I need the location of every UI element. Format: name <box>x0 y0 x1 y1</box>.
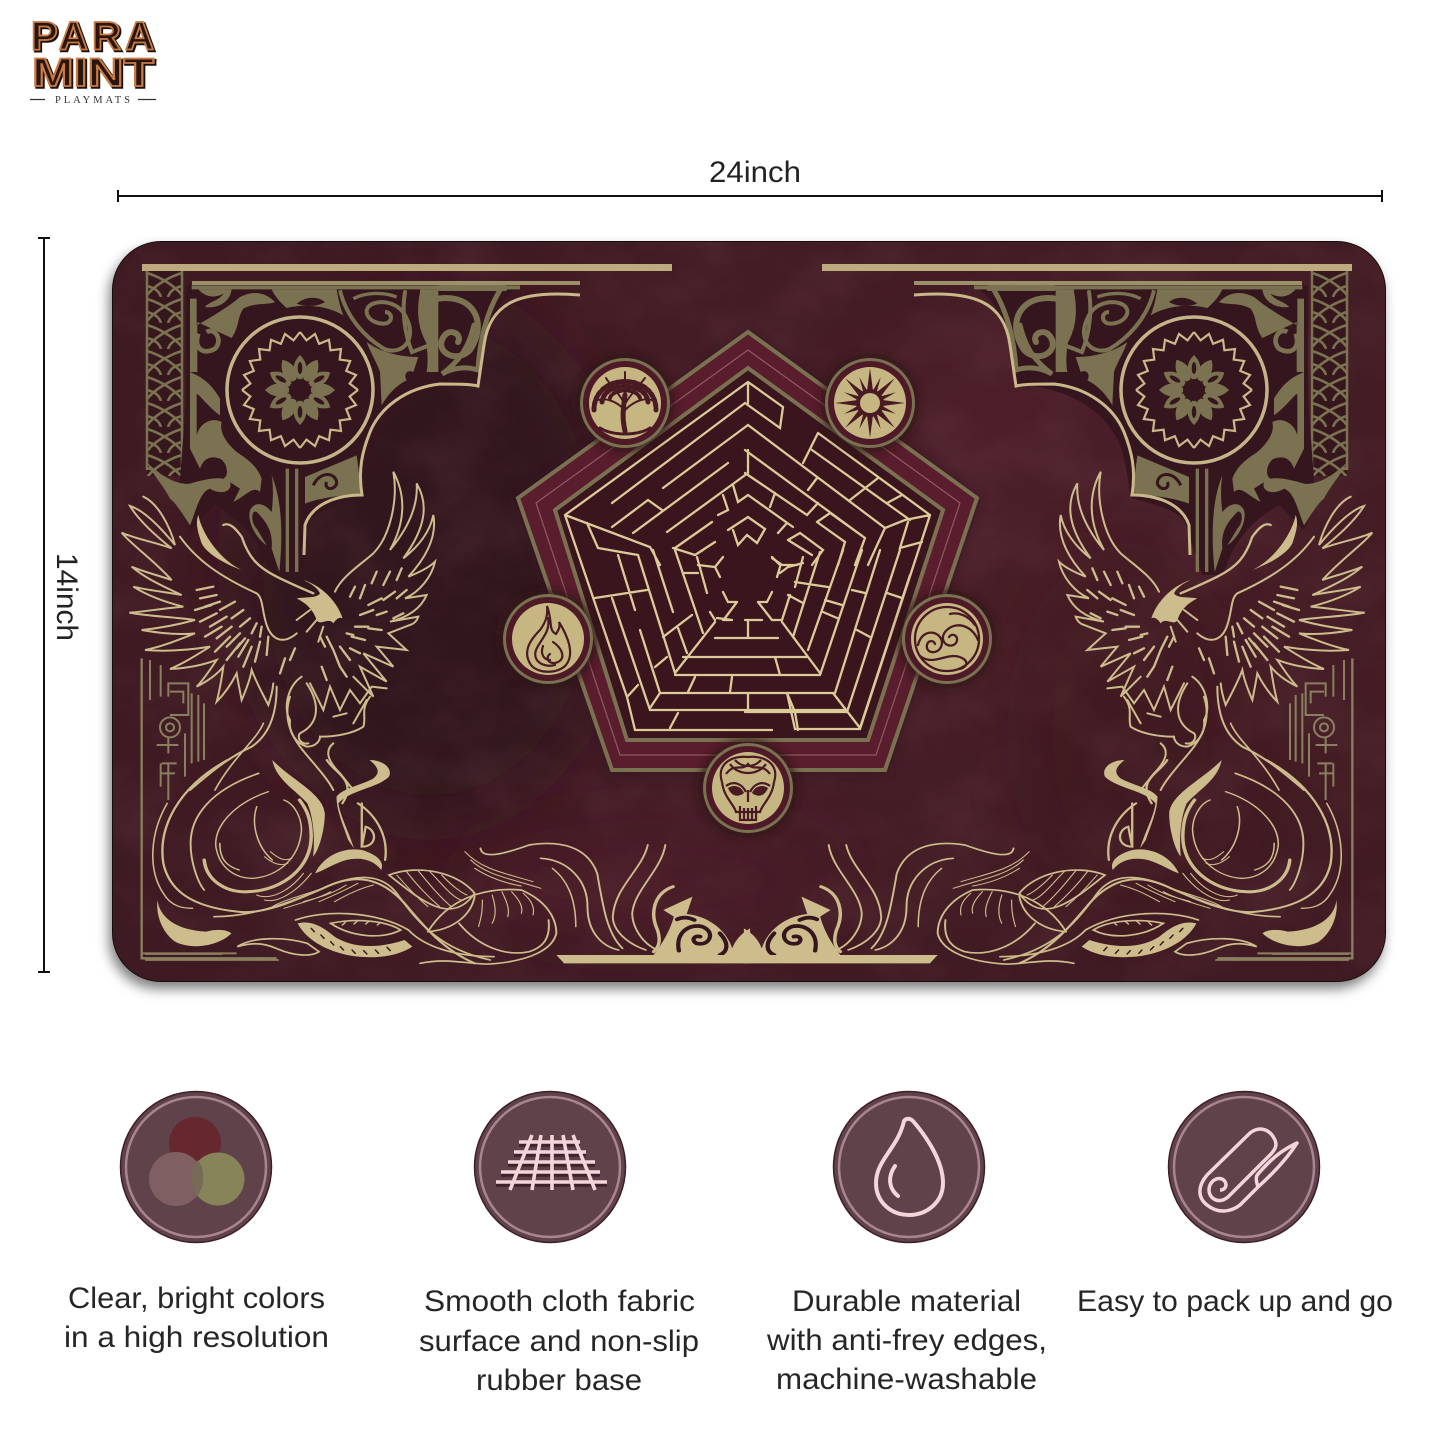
corner and phoenix ornament: right (mirrored) <box>744 264 1372 964</box>
icon: rolled mat <box>1168 1092 1320 1242</box>
upper-right scroll cluster <box>404 288 505 374</box>
feature: durable <box>766 1092 1047 1396</box>
icon: grid <box>474 1092 626 1242</box>
medallion: fire <box>498 589 598 689</box>
phoenix <box>122 472 435 790</box>
pentagon bands <box>512 326 983 776</box>
logo: Para Mint Playmats <box>30 14 156 106</box>
bottom bar and scroll <box>556 897 750 963</box>
snake neck and head <box>337 760 390 848</box>
medallion: air <box>897 589 997 689</box>
feature: colours <box>64 1092 329 1354</box>
snake body <box>272 760 325 857</box>
caption: machine-washable <box>776 1363 1037 1396</box>
width dimension: 24inch: 24inch <box>709 156 801 189</box>
logo: Para Mint Playmats: MINT <box>34 52 156 96</box>
medallion: sun <box>820 353 920 453</box>
plume barbs <box>272 852 541 927</box>
corner and phoenix ornament: left <box>122 264 750 964</box>
caption: surface and non-slip <box>419 1325 699 1358</box>
feature: fabric <box>419 1092 699 1397</box>
caption: Clear, bright colors <box>68 1282 325 1315</box>
feature: portable <box>1077 1092 1393 1318</box>
olive spandrel <box>147 285 522 575</box>
ornament gold curve <box>304 294 580 555</box>
logo: Para Mint Playmats: PARA <box>31 14 154 58</box>
maze walls <box>565 382 930 730</box>
phoenix lower body <box>190 687 277 790</box>
height dimension: 14inch: 14inch <box>50 553 83 641</box>
phoenix tail, snake and plumes <box>146 760 750 964</box>
pentagon maze <box>512 326 983 776</box>
icon: colour circles <box>120 1092 272 1242</box>
snake coil <box>315 849 382 873</box>
mandala medallion <box>227 317 373 463</box>
tail loops <box>153 760 475 963</box>
phoenix right wing outer feathers <box>335 472 435 697</box>
bottom gold bar <box>700 955 794 963</box>
caption: with anti-frey edges, <box>766 1324 1047 1357</box>
second olive bar <box>192 281 580 285</box>
phoenix right wing inner feathers <box>320 568 407 680</box>
logo: Para Mint Playmats: PARA <box>32 16 156 60</box>
caption: rubber base <box>476 1364 642 1397</box>
icon: water drop <box>834 1092 984 1242</box>
phoenix arm and neck <box>223 524 313 593</box>
gold sweep <box>157 900 231 946</box>
logo: Para Mint Playmats: PLAYMATS <box>55 95 130 106</box>
caption <box>64 1282 329 1354</box>
height dimension: 14inch <box>38 238 83 972</box>
caption: Smooth cloth fabric <box>424 1285 695 1318</box>
caption <box>419 1285 699 1397</box>
top gold bar <box>142 264 672 271</box>
lower snake <box>298 922 412 957</box>
medallion: skull <box>698 738 798 838</box>
frame bottom lines <box>146 954 278 960</box>
ropes and feathers <box>214 843 665 964</box>
phoenix left wing inner feathers <box>195 587 295 673</box>
frame glyphs lower left <box>142 658 277 958</box>
phoenix head <box>297 580 343 623</box>
caption: Easy to pack up and go <box>1077 1285 1393 1318</box>
medallion: tree <box>575 353 675 453</box>
caption <box>766 1285 1047 1396</box>
logo: Para Mint Playmats: MINT <box>32 51 154 95</box>
playmat <box>112 241 1386 982</box>
phoenix upper wing leaf <box>197 515 242 570</box>
braid column <box>147 271 182 476</box>
width dimension: 24inch <box>118 156 1382 202</box>
caption: Durable material <box>792 1285 1021 1318</box>
caption: in a high resolution <box>64 1321 329 1354</box>
phoenix left wing zigzag feathers <box>122 497 273 705</box>
